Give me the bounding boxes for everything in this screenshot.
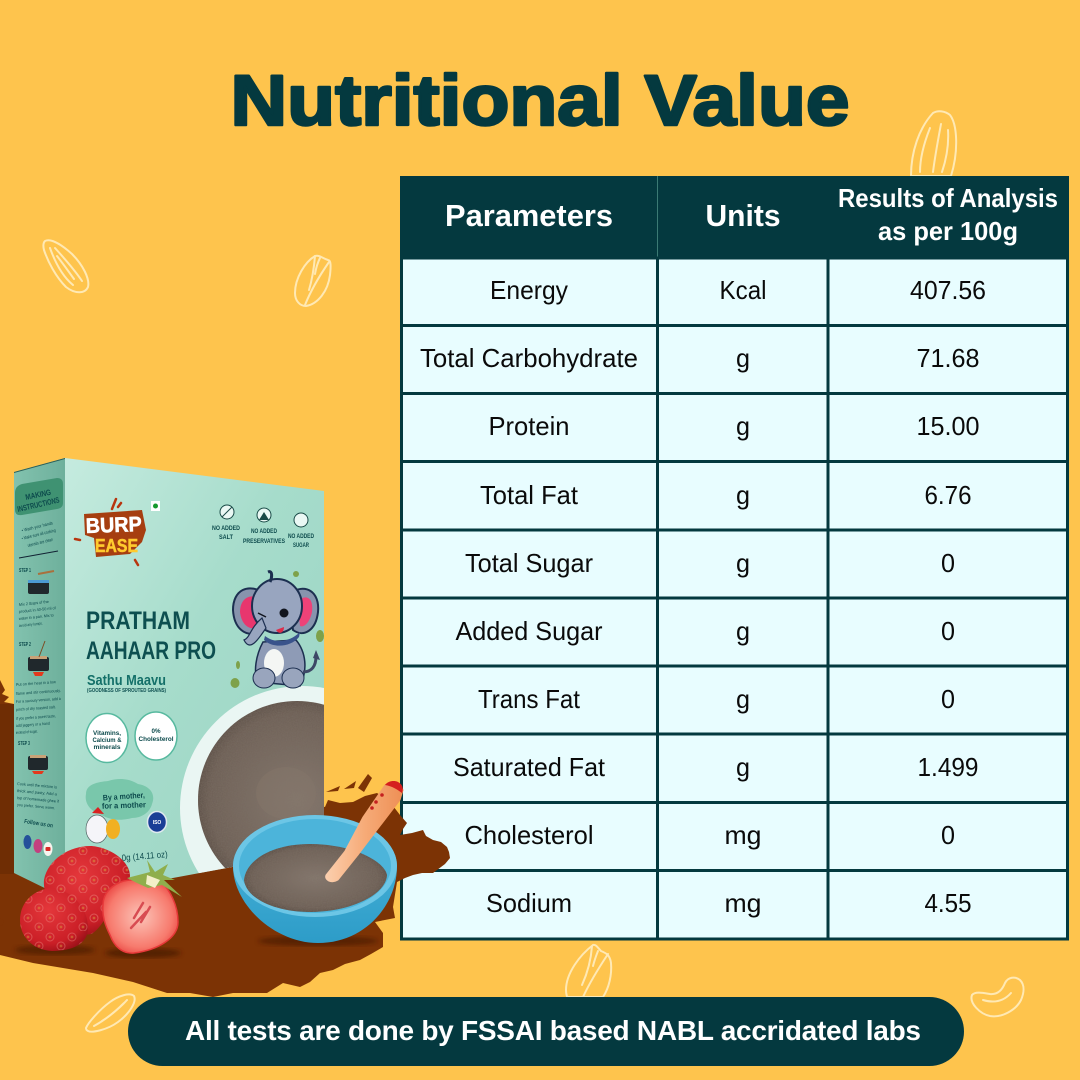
box side panel: INSTRUCTIONS <box>16 495 61 514</box>
box side panel: If you prefer a sweet taste, <box>16 713 56 721</box>
row: Energy: Kcal <box>720 275 766 305</box>
paint splash brown <box>0 680 450 997</box>
box side panel: avoid any lumps. <box>19 621 43 628</box>
box side panel: Mix 2 tbsps of the <box>19 599 50 607</box>
footer banner: All tests are done by FSSAI based NABL accridated labs <box>185 1015 921 1046</box>
row: Protein: g <box>736 411 750 441</box>
product name: Sathu Maavu <box>87 672 166 689</box>
footer banner <box>128 997 964 1066</box>
box side panel: you prefer. Serve warm. <box>17 802 55 810</box>
splash flecks <box>0 774 372 926</box>
row: Total Fat: g <box>736 480 750 510</box>
product box <box>14 458 324 888</box>
title: Nutritional Value <box>230 62 850 141</box>
no added badges: NO ADDED <box>212 525 240 532</box>
row: Trans Fat: 0 <box>941 684 955 714</box>
row: Energy <box>490 275 986 305</box>
icon: almond bottom left <box>86 994 135 1032</box>
icon: almond left <box>43 240 88 292</box>
speech cloud and chicks: ISO <box>153 820 161 826</box>
row: Added Sugar: g <box>736 616 750 646</box>
row: Cholesterol: mg <box>724 820 762 850</box>
table header: Units <box>706 198 780 233</box>
table header: Results of Analysis <box>838 183 1058 213</box>
box side panel: • Wash your hands <box>21 520 54 533</box>
box side panel: water in a pan. Mix to <box>19 612 55 621</box>
box side panel: pinch of dry roasted salt. <box>16 704 56 712</box>
icon: almond top right <box>911 111 956 176</box>
strawberry small <box>20 888 88 951</box>
row: Cholesterol: Cholesterol <box>464 820 594 850</box>
box side panel: Cook until the mixture is <box>17 781 57 789</box>
box side panel: product in 40-50 ml of <box>19 605 57 614</box>
row: Protein: 15.00 <box>916 411 980 441</box>
row: Saturated Fat: 1.499 <box>918 752 978 782</box>
table header: Parameters <box>445 198 613 233</box>
brand logo: BURP <box>85 513 142 538</box>
shadow left of box <box>0 704 14 874</box>
strawberries <box>15 846 182 958</box>
strawberry large <box>44 846 130 934</box>
row: Sodium: 4.55 <box>924 888 972 918</box>
net weight: 0g (14.11 oz) <box>121 849 168 863</box>
no added badges <box>212 505 314 549</box>
box side panel: tsp of homemade ghee if <box>17 795 60 804</box>
row: Energy: 407.56 <box>910 275 986 305</box>
row: Saturated Fat <box>453 752 978 782</box>
bowl of porridge <box>233 781 403 946</box>
row: Total Carbohydrate: Total Carbohydrate <box>420 343 638 373</box>
box art clip <box>180 686 324 874</box>
box side panel: For a savoury version, add a <box>16 696 62 704</box>
product name: (GOODNESS OF SPROUTED GRAINS) <box>87 688 166 694</box>
speech cloud and chicks <box>86 779 166 843</box>
claim badges: Vitamins, <box>93 731 121 737</box>
row: Total Sugar: Total Sugar <box>465 548 593 578</box>
no added badges: PRESERVATIVES <box>243 538 286 545</box>
product name <box>86 607 216 694</box>
nutrition table <box>400 176 1069 939</box>
claim badges: Calcium & <box>92 738 122 744</box>
brand logo <box>75 499 160 565</box>
spoon <box>326 781 403 882</box>
row: Trans Fat: g <box>736 684 750 714</box>
box front panel <box>65 458 324 898</box>
strawberry cut <box>103 860 182 953</box>
box side panel <box>14 458 65 898</box>
box side panel: flame and stir continuously. <box>16 688 61 696</box>
row: Trans Fat: Trans Fat <box>478 684 581 714</box>
speech cloud and chicks: for a mother <box>102 800 146 811</box>
row: Total Sugar <box>465 548 955 578</box>
box side panel: STEP 1 <box>19 568 31 574</box>
table header <box>400 176 1069 259</box>
row: Sodium: mg <box>724 888 762 918</box>
claim badges <box>86 712 177 762</box>
row: Total Fat: 6.76 <box>924 480 972 510</box>
product photo plate <box>180 686 324 874</box>
product name: PRATHAM <box>86 607 190 635</box>
box side panel: Put on the heat in a low <box>16 679 56 687</box>
row: Cholesterol <box>464 820 955 850</box>
row: Added Sugar <box>456 616 955 646</box>
row: Trans Fat <box>478 684 955 714</box>
row: Total Fat <box>480 480 972 510</box>
no added badges: SALT <box>219 534 233 541</box>
no added badges: SUGAR <box>293 542 309 549</box>
row: Total Carbohydrate <box>420 343 980 373</box>
row: Total Carbohydrate: 71.68 <box>916 343 980 373</box>
no added badges: NO ADDED <box>288 533 314 540</box>
row: Added Sugar: Added Sugar <box>456 616 603 646</box>
box side panel: MAKING <box>25 488 52 502</box>
icon: pistachio bottom <box>566 945 611 997</box>
row: Saturated Fat: g <box>736 752 750 782</box>
porridge surface <box>244 844 387 912</box>
icon: pistachio left <box>295 256 331 306</box>
icon: cashew <box>971 978 1024 1016</box>
row: Total Sugar: g <box>736 548 750 578</box>
claim badges: Cholesterol <box>138 737 174 743</box>
row: Total Fat: Total Fat <box>480 480 579 510</box>
speech cloud and chicks: By a mother, <box>103 791 145 802</box>
row: Sodium: Sodium <box>486 888 572 918</box>
box side panel: instead of sugar. <box>16 728 38 735</box>
claim badges: 0% <box>152 729 161 735</box>
box side panel: STEP 2 <box>19 642 31 648</box>
box side panel: thick and pasty. Add a <box>17 788 58 797</box>
elephant mascot <box>230 571 324 688</box>
product name: AAHAAR PRO <box>86 637 216 665</box>
row: Sodium <box>486 888 972 918</box>
table body grid <box>401 258 1068 939</box>
box side panel: Follow us on <box>24 819 54 830</box>
claim badges: minerals <box>94 745 121 751</box>
row: Saturated Fat: Saturated Fat <box>453 752 606 782</box>
row: Total Sugar: 0 <box>941 548 955 578</box>
row: Energy: Energy <box>490 275 568 305</box>
row: Cholesterol: 0 <box>941 820 955 850</box>
box side panel: STEP 3 <box>18 741 30 747</box>
row: Protein <box>488 411 980 441</box>
box side panel: • Make sure all cooking <box>21 528 57 541</box>
no added badges: NO ADDED <box>251 528 277 535</box>
box side panel: utensils are clean <box>27 537 54 548</box>
bowl body <box>233 816 397 943</box>
box side panel: add jaggery or a hand <box>16 721 50 728</box>
row: Added Sugar: 0 <box>941 616 955 646</box>
table header: as per 100g <box>878 216 1018 246</box>
row: Protein: Protein <box>488 411 570 441</box>
brand logo: EASE <box>95 536 138 556</box>
row: Total Carbohydrate: g <box>736 343 750 373</box>
